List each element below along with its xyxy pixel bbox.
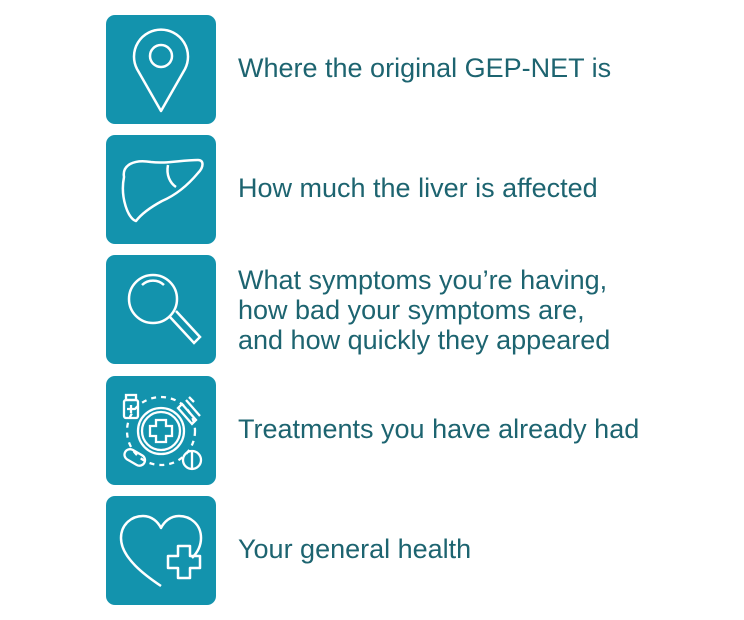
text: liver: How much the liver is affected xyxy=(238,173,598,203)
icon box: magnifier xyxy=(106,255,216,364)
text: where: Where the original GEP-NET is xyxy=(238,53,611,83)
text: symptoms: What symptoms you’re having, xyxy=(238,265,607,295)
icon box: heart xyxy=(106,496,216,605)
icon box: location pin xyxy=(106,15,216,124)
text: treatments: Treatments you have already had xyxy=(238,414,639,444)
icon box: treatments xyxy=(106,376,216,485)
text: health: Your general health xyxy=(238,534,471,564)
icon box: liver xyxy=(106,135,216,244)
text: symptoms: and how quickly they appeared xyxy=(238,325,610,355)
text: symptoms xyxy=(238,265,610,355)
text: symptoms: how bad your symptoms are, xyxy=(238,295,585,325)
